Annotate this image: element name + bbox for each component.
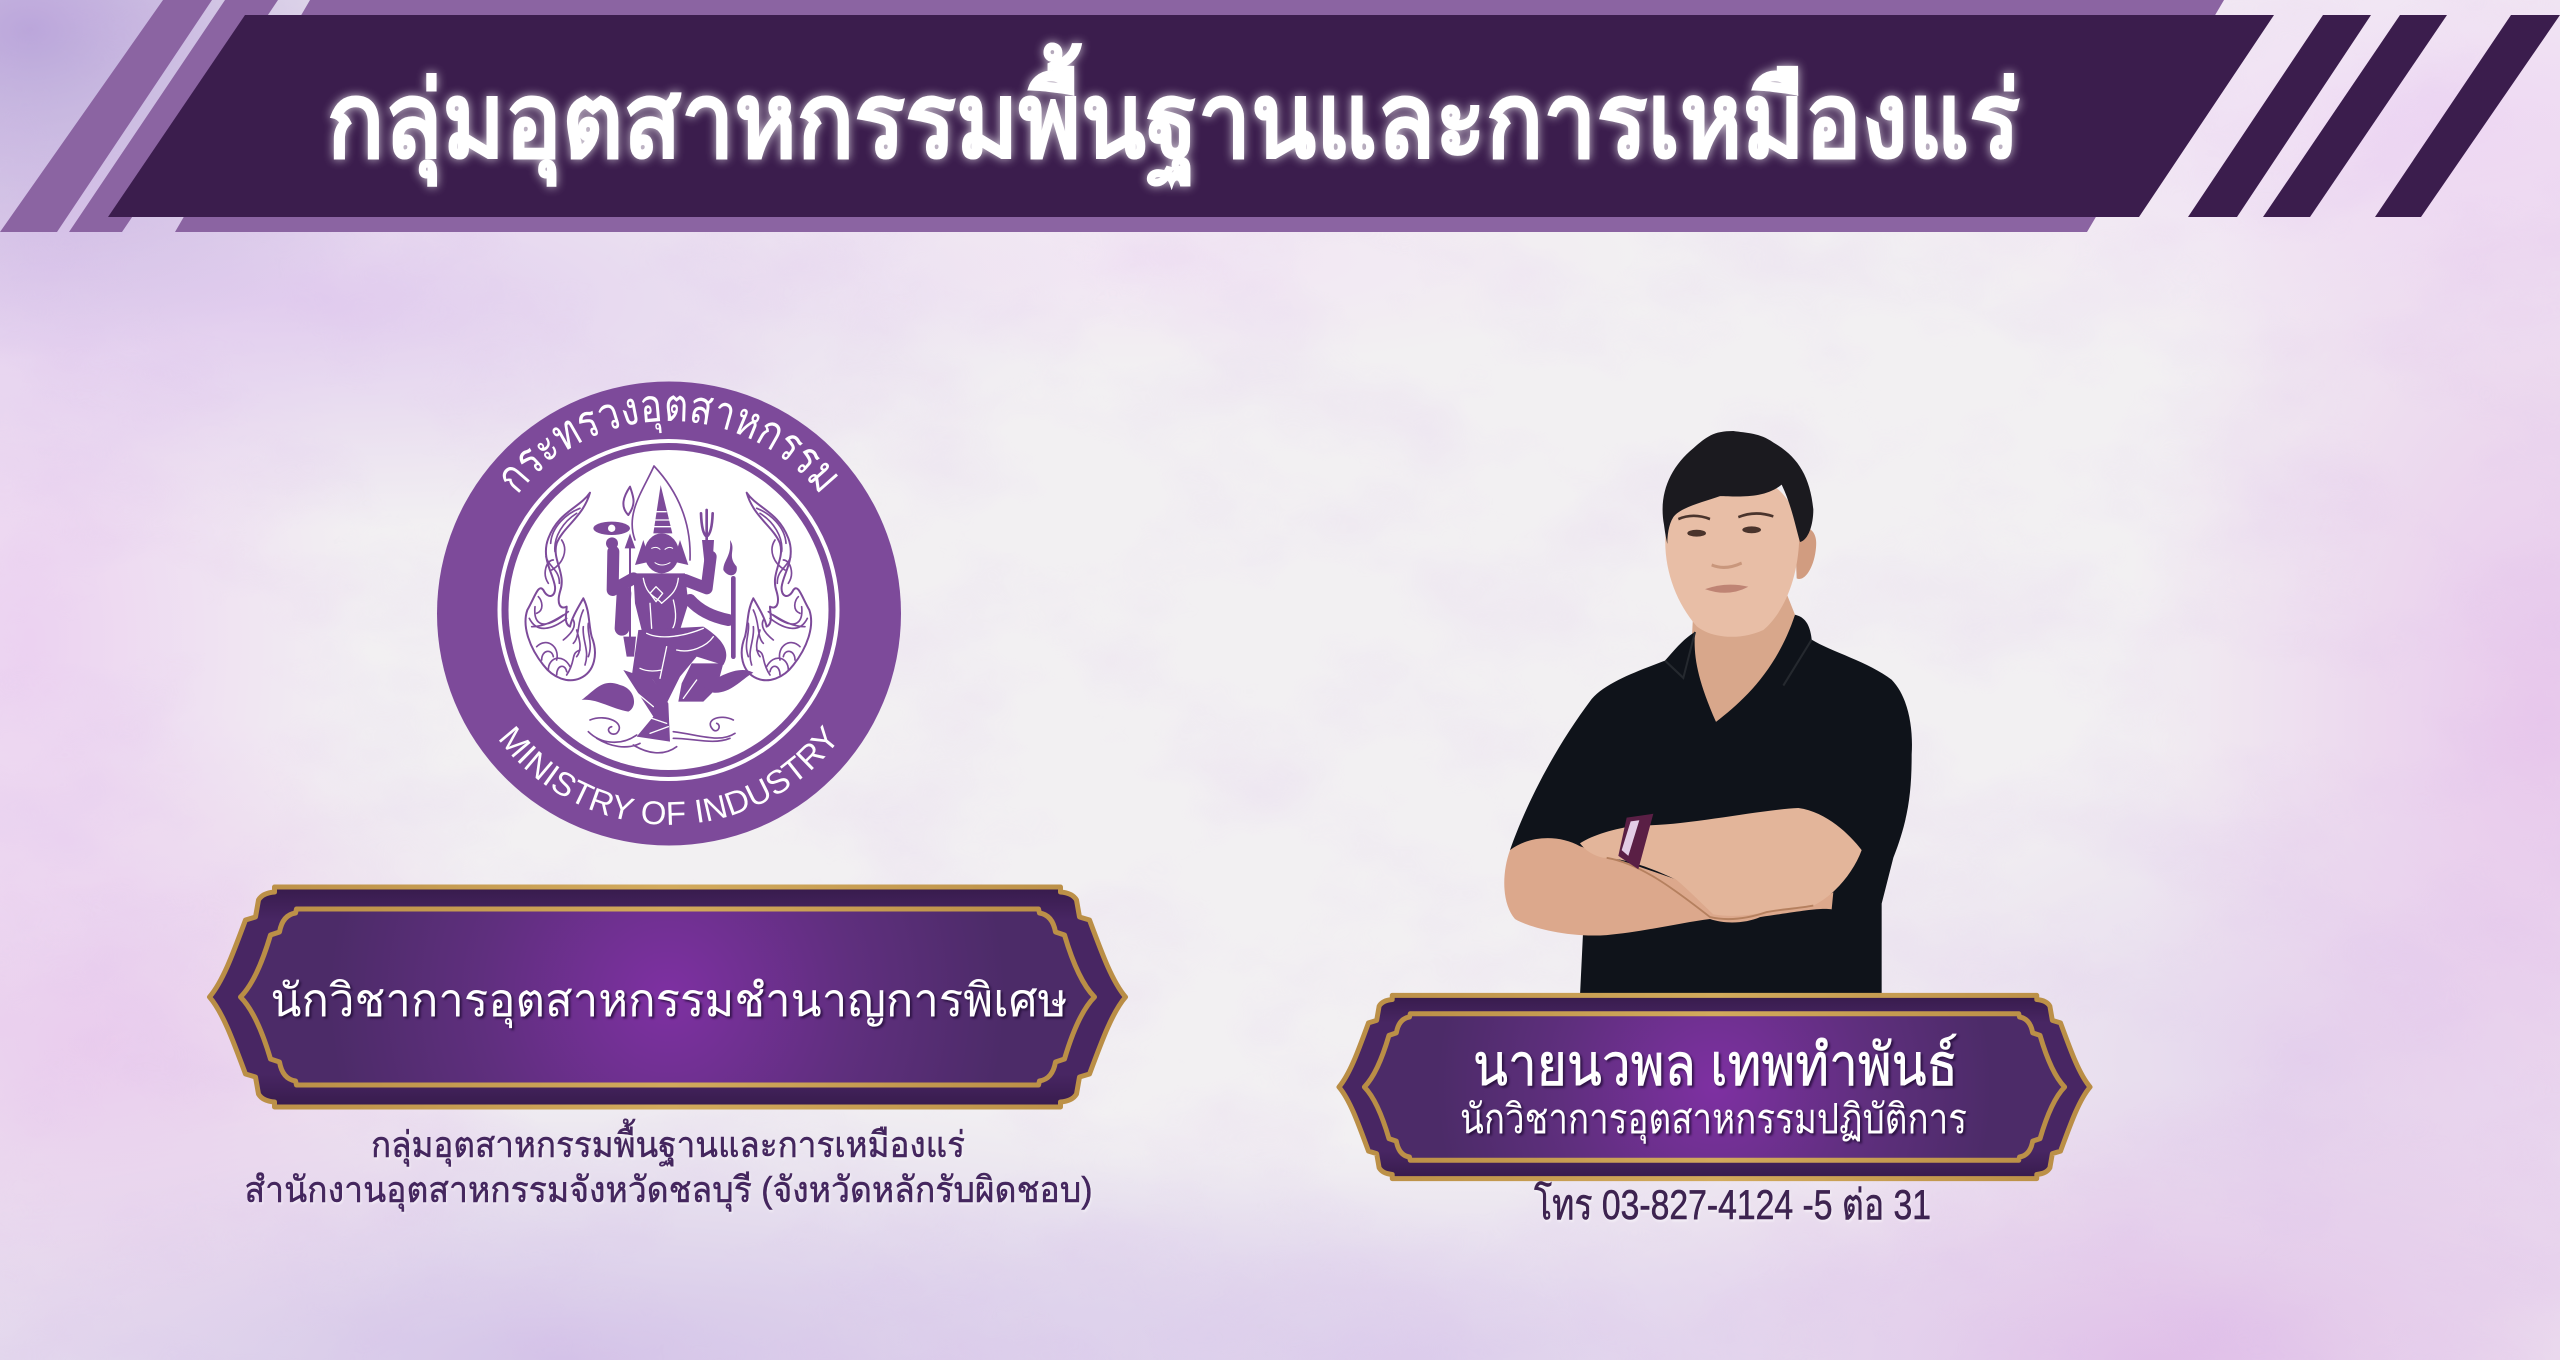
black polo shirt bbox=[1510, 615, 1912, 996]
header lighter back band bbox=[175, 0, 2224, 232]
title: กลุ่มอุตสาหกรรมพื้นฐานและการเหมืองแร่ bbox=[327, 42, 2020, 190]
phone number: โทร 03-827-4124 -5 ต่อ 31 bbox=[1534, 1180, 1931, 1228]
header dark band bbox=[108, 15, 2274, 217]
seal emblem: deity with flames bbox=[526, 466, 811, 753]
left caption: สำนักงานอุตสาหกรรมจังหวัดชลบุรี (จังหวัดหลักรับผิดชอบ) bbox=[244, 1169, 1092, 1212]
seal text: Thai: กระทรวงอุตสาหกรรม bbox=[502, 395, 838, 493]
left caption bbox=[244, 1118, 1092, 1212]
left plaque: position title: นักวิชาการอุตสาหกรรมชำนาญการพิเศษ bbox=[270, 974, 1068, 1029]
wristwatch band bbox=[1618, 814, 1653, 869]
eyes and brows bbox=[1678, 514, 1773, 537]
right accent stripes bbox=[2188, 15, 2560, 217]
face bbox=[1665, 475, 1799, 637]
portrait: man with crossed arms bbox=[1504, 431, 1912, 996]
right plaque: name and position bbox=[1339, 995, 2090, 1179]
collar shading bbox=[1665, 632, 1812, 686]
left plaque: position title bbox=[210, 887, 1126, 1107]
header banner bbox=[0, 0, 2560, 232]
lower folded arm bbox=[1504, 838, 1833, 936]
hair bbox=[1663, 431, 1813, 544]
arm shading bbox=[1607, 858, 1813, 919]
nose and mouth bbox=[1705, 563, 1748, 593]
left caption: กลุ่มอุตสาหกรรมพื้นฐานและการเหมืองแร่ bbox=[371, 1118, 965, 1167]
seal text: English: MINISTRY OF INDUSTRY bbox=[499, 724, 834, 825]
ear bbox=[1795, 528, 1816, 579]
left accent stripes bbox=[0, 0, 278, 232]
logo: Ministry of Industry seal bbox=[437, 382, 901, 846]
upper folded arm bbox=[1580, 808, 1862, 916]
neck bbox=[1690, 594, 1795, 728]
right plaque: name and position: นักวิชาการอุตสาหกรรมปฏิบัติการ bbox=[1460, 1096, 1967, 1144]
right plaque: name and position: นายนวพล เทพทำพันธ์ bbox=[1473, 1033, 1958, 1098]
